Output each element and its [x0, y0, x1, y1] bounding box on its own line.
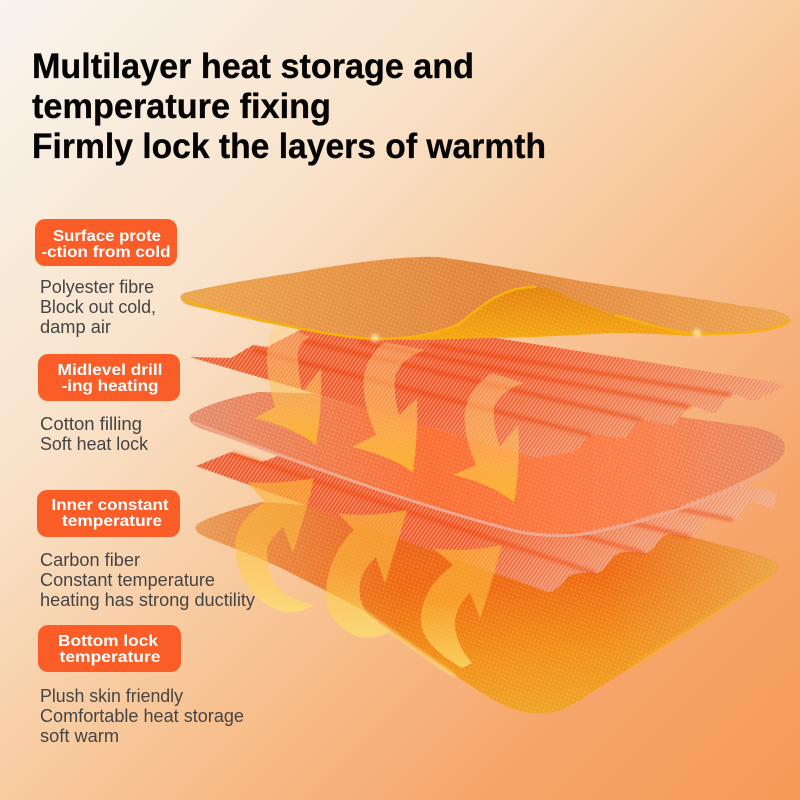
label: inner constant temperature badge: Inner constant [52, 497, 168, 514]
label: bottom lock temperature badge [38, 625, 181, 672]
layer: middle cotton filling sheet [189, 392, 785, 536]
label: surface protection badge: -ction from cold [42, 244, 170, 261]
layer: lower corrugated carbon fiber sheet [196, 440, 777, 592]
text: surface description: Polyester fibre [40, 277, 154, 297]
layer: top polyester sheet [181, 257, 791, 342]
title [32, 47, 546, 166]
text: inner description: Carbon fiber [40, 550, 140, 570]
arrow: descending heat left [255, 322, 321, 445]
layer: bottom plush sheet [196, 502, 778, 713]
title: Multilayer heat storage and [32, 47, 474, 86]
text: bottom description: soft warm [40, 726, 119, 746]
layer: upper corrugated sheet [190, 330, 785, 458]
title: temperature fixing [32, 87, 331, 126]
text: inner description: Constant temperature [40, 570, 215, 590]
label: bottom lock temperature badge: temperature [60, 649, 161, 666]
text: surface description [40, 277, 156, 337]
text: inner description: heating has strong ductility [40, 590, 255, 610]
text: surface description: damp air [40, 317, 111, 337]
label: bottom lock temperature badge: Bottom lock [58, 633, 158, 650]
text: bottom description: Plush skin friendly [40, 686, 183, 706]
text: surface description: Block out cold, [40, 297, 156, 317]
text: midlevel description [40, 414, 149, 454]
label: midlevel drilling badge: -ing heating [62, 378, 158, 395]
title: Firmly lock the layers of warmth [32, 127, 546, 166]
arrow: rising heat left [235, 478, 314, 612]
text: midlevel description: Cotton filling [40, 414, 142, 434]
label: midlevel drilling badge: Midlevel drill [58, 362, 162, 379]
text: bottom description [40, 686, 244, 746]
arrow: rising heat centre [326, 510, 407, 638]
label: inner constant temperature badge [37, 490, 180, 537]
text: midlevel description: Soft heat lock [40, 434, 149, 454]
arrow: rising heat right [421, 545, 502, 668]
text: inner description [40, 550, 255, 610]
label: inner constant temperature badge: temperature [62, 513, 162, 530]
label: surface protection badge: Surface prote [53, 228, 161, 245]
arrow: descending heat right [453, 373, 524, 502]
label: midlevel drilling badge [38, 354, 180, 401]
arrow: descending heat centre [352, 342, 425, 472]
text: bottom description: Comfortable heat storage [40, 706, 244, 726]
label: surface protection badge [35, 219, 177, 266]
